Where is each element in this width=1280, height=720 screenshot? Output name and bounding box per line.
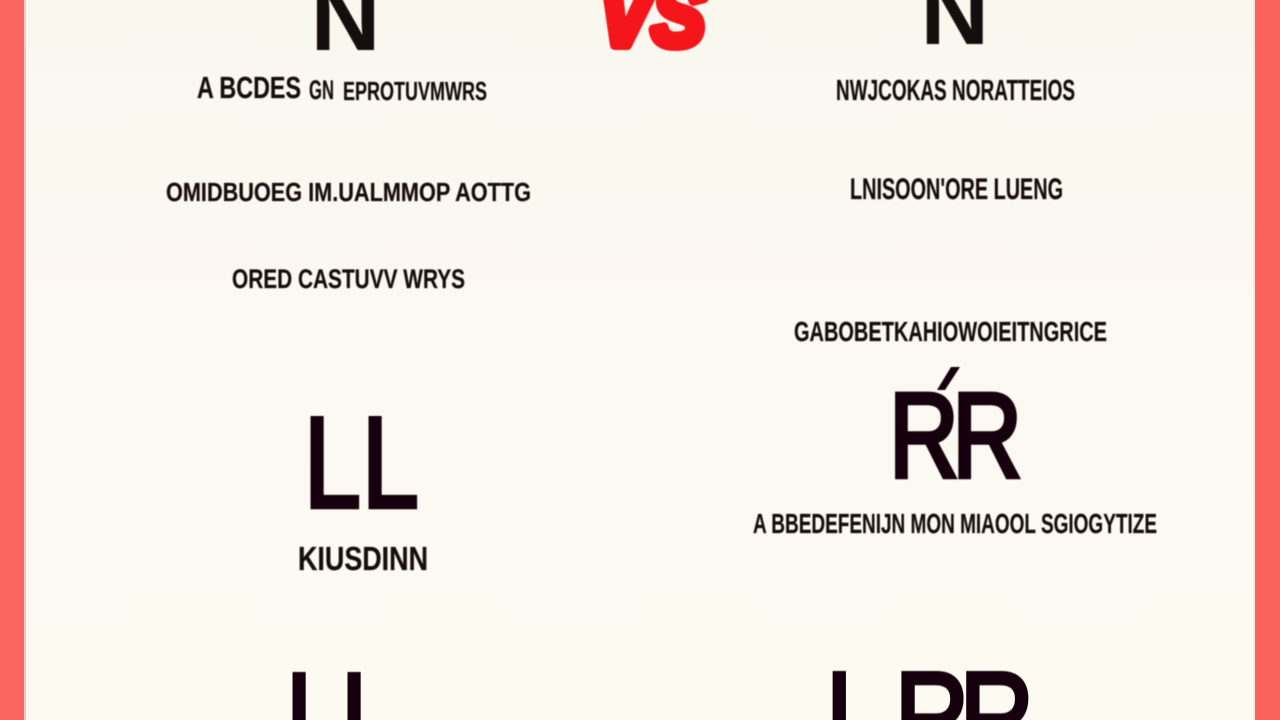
- left text line 1: GN: [309, 75, 334, 105]
- left red border: [0, 0, 24, 720]
- left text line 1: A BCDES: [197, 70, 301, 105]
- right column: [752, 0, 1158, 539]
- large letters RR with accent: RR: [889, 369, 1022, 504]
- left text line 3: ORED CASTUVV WRYS: [232, 264, 465, 294]
- left column: [166, 0, 531, 577]
- large letters LL: LL: [304, 390, 419, 535]
- right red border: [1255, 0, 1280, 720]
- left caption: KIUSDINN: [298, 540, 428, 577]
- left text line 1: [197, 70, 487, 106]
